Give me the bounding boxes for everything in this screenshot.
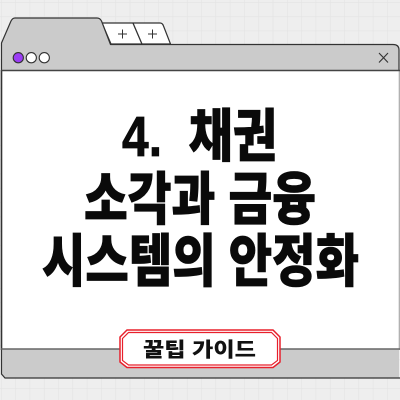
window content area xyxy=(2,70,399,350)
title: 소각과 금융 xyxy=(84,168,316,232)
badge: tip guide xyxy=(120,330,280,368)
tab: plus 1 xyxy=(102,23,142,44)
window footer bar xyxy=(2,349,399,378)
badge: tip guide: 꿀팁 가이드 xyxy=(143,338,256,362)
title xyxy=(42,105,359,294)
window buttons xyxy=(13,53,49,63)
title: 4. 채권 xyxy=(122,105,277,169)
icon: close xyxy=(379,53,388,62)
window top bar with main tab xyxy=(2,18,399,71)
tab: plus 2 xyxy=(133,23,170,44)
